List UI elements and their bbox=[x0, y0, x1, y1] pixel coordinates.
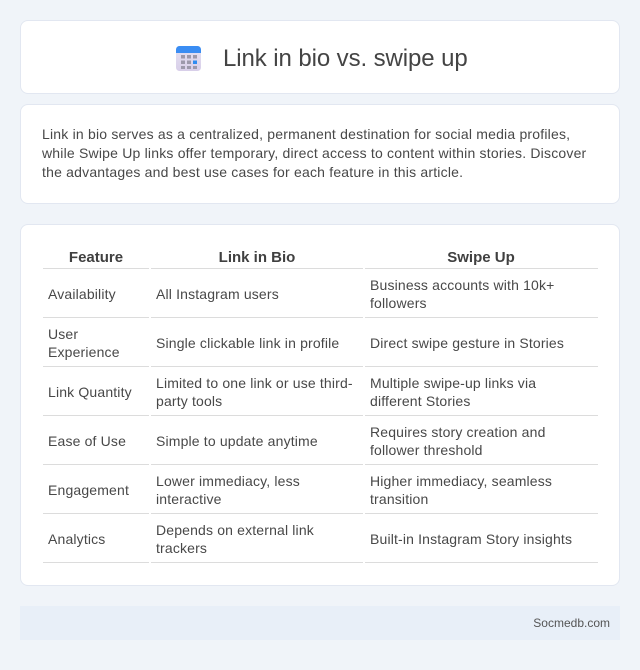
row: link quantity: Link Quantity bbox=[48, 384, 132, 400]
column headers: Feature bbox=[69, 249, 123, 266]
row: engagement: Lower immediacy, less bbox=[156, 473, 300, 489]
row: analytics: Built-in Instagram Story insights bbox=[370, 531, 572, 547]
intro text: while Swipe Up links offer temporary, direct access to content within stories. Discover bbox=[42, 145, 586, 161]
row: analytics: trackers bbox=[156, 540, 207, 556]
row: availability: Availability bbox=[48, 286, 116, 302]
icon: calendar bbox=[176, 46, 201, 71]
column headers: Link in Bio bbox=[219, 249, 295, 266]
row: link quantity: party tools bbox=[156, 393, 222, 409]
header card bbox=[20, 20, 620, 94]
intro card bbox=[20, 104, 620, 204]
row: analytics: Analytics bbox=[48, 531, 105, 547]
row: user experience: User bbox=[48, 326, 78, 342]
row: engagement: Higher immediacy, seamless bbox=[370, 473, 552, 489]
row: engagement bbox=[48, 473, 552, 507]
row: engagement: transition bbox=[370, 491, 428, 507]
table card bbox=[20, 224, 620, 586]
row: link quantity: Limited to one link or use third- bbox=[156, 375, 353, 391]
row: ease of use bbox=[48, 424, 546, 458]
intro text: the advantages and best use cases for each feature in this article. bbox=[42, 164, 463, 180]
row: availability: All Instagram users bbox=[156, 286, 279, 302]
row: availability: Business accounts with 10k+ bbox=[370, 277, 554, 293]
row: user experience: Experience bbox=[48, 344, 120, 360]
row: ease of use: Ease of Use bbox=[48, 433, 126, 449]
row: link quantity: different Stories bbox=[370, 393, 471, 409]
row: engagement: interactive bbox=[156, 491, 222, 507]
row: user experience bbox=[48, 326, 564, 360]
row: analytics bbox=[48, 522, 572, 556]
row: ease of use: Simple to update anytime bbox=[156, 433, 318, 449]
row: availability: followers bbox=[370, 295, 427, 311]
row: link quantity bbox=[48, 375, 536, 409]
row: link quantity: Multiple swipe-up links via bbox=[370, 375, 536, 391]
row: availability bbox=[48, 277, 554, 311]
title: Link in bio vs. swipe up bbox=[223, 45, 468, 72]
intro text bbox=[42, 126, 586, 180]
row: analytics: Depends on external link bbox=[156, 522, 314, 538]
comparison table bbox=[43, 249, 598, 563]
row: ease of use: Requires story creation and bbox=[370, 424, 546, 440]
row: user experience: Single clickable link in profile bbox=[156, 335, 339, 351]
footer bar bbox=[20, 606, 620, 640]
column headers bbox=[69, 249, 515, 266]
row: user experience: Direct swipe gesture in Stories bbox=[370, 335, 564, 351]
row: engagement: Engagement bbox=[48, 482, 129, 498]
column headers: Swipe Up bbox=[447, 249, 515, 266]
row: ease of use: follower threshold bbox=[370, 442, 483, 458]
intro text: Link in bio serves as a centralized, permanent destination for social media profiles, bbox=[42, 126, 570, 142]
footer credit: Socmedb.com bbox=[533, 616, 610, 630]
